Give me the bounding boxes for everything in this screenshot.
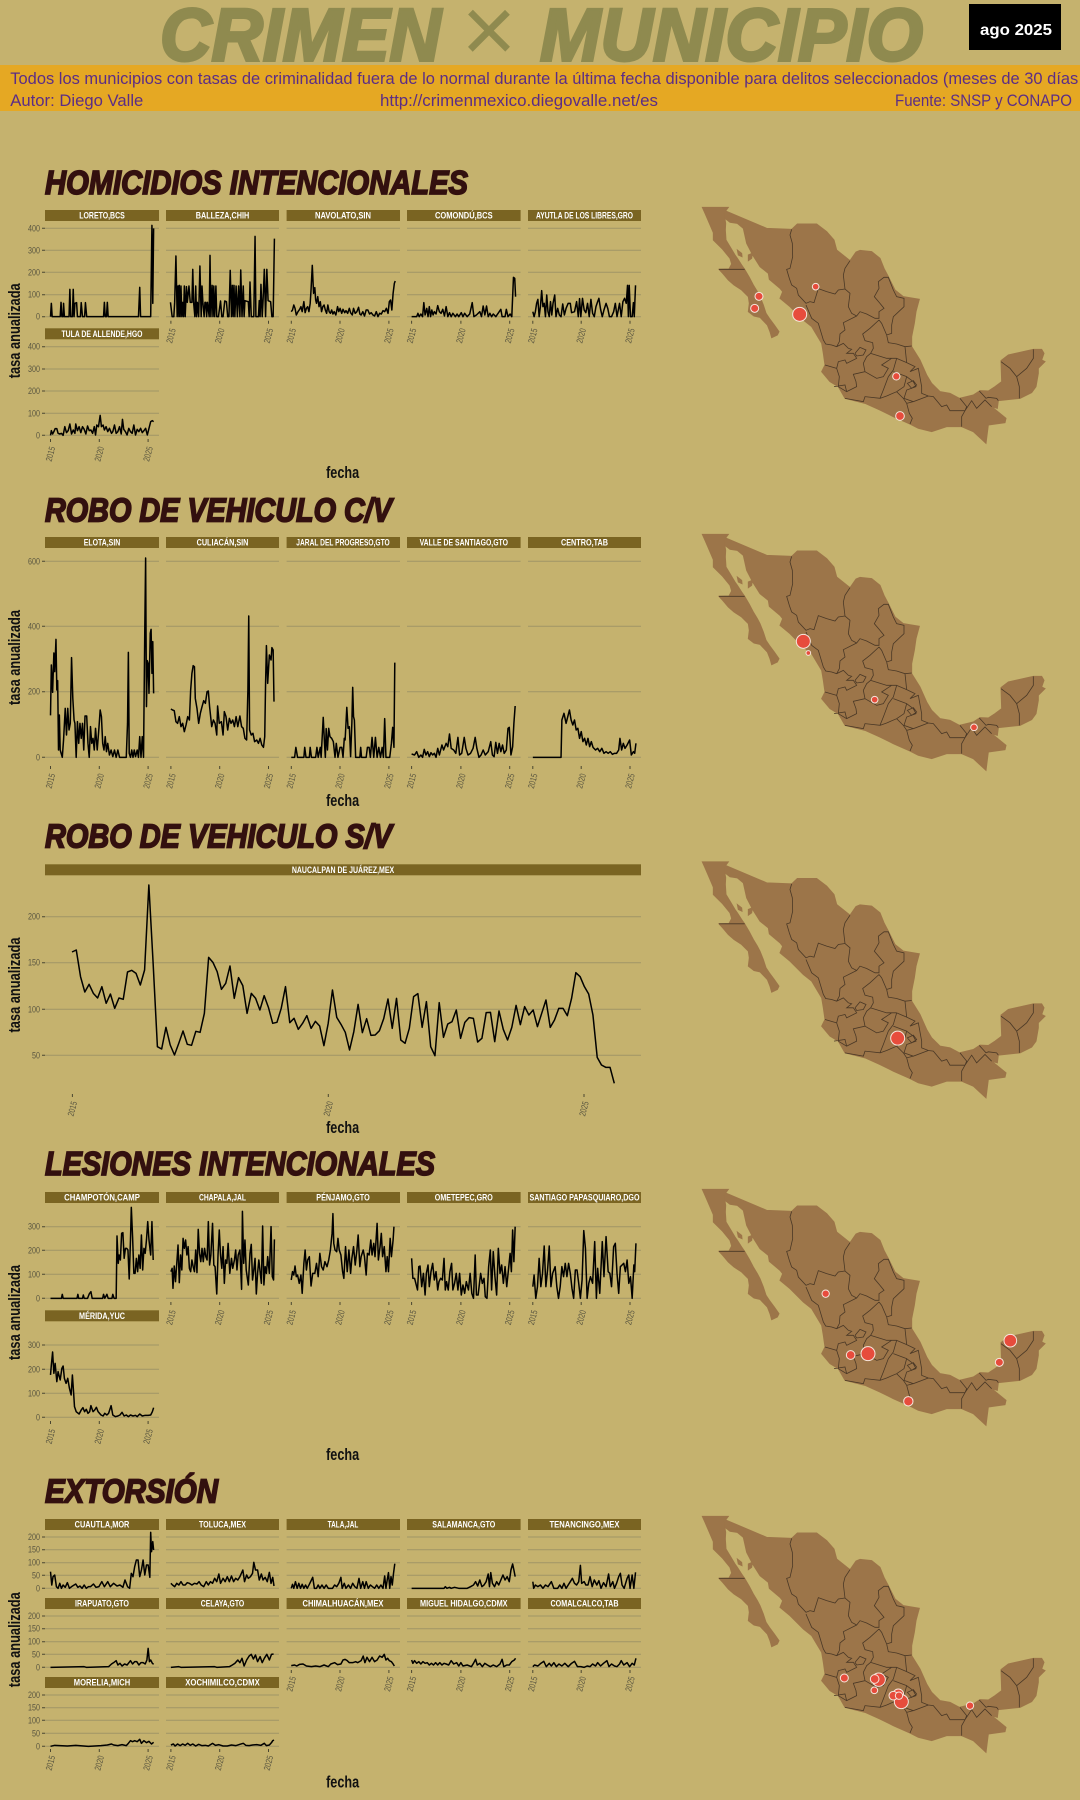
panel: Mérida: 2025 xyxy=(141,1428,155,1445)
panel: Ayutla: 2020 xyxy=(574,327,588,344)
panel: Valle de Santiago: 2015 xyxy=(405,772,418,790)
panel: Navolato: 2025 xyxy=(382,327,396,344)
panel: Chimalhuacán: 2015 xyxy=(285,1675,298,1693)
panel: Ometepec: 2020 xyxy=(454,1309,468,1326)
panel: Champotón: 300 xyxy=(28,1222,40,1232)
panel: Tula de Allende: 400 xyxy=(28,342,40,352)
panel: Tula de Allende: 200 xyxy=(28,386,40,396)
panel: Loreto: 200 xyxy=(28,267,40,277)
panel: Centro: 2020 xyxy=(574,772,588,790)
panel: Naucalpan de Juárez: 200 xyxy=(28,912,40,922)
panel: Elota: ELOTA,SIN xyxy=(84,538,120,548)
panel: Jaral del Progreso: 2025 xyxy=(382,772,396,790)
panel: Chimalhuacán: CHIMALHUACÁN,MEX xyxy=(302,1598,384,1610)
panel: Loreto: 400 xyxy=(28,223,40,233)
panel: Comondú xyxy=(405,210,521,344)
panel: Elota: 2015 xyxy=(44,772,57,790)
axis title y: tasa anualizada xyxy=(6,283,24,378)
panel: Salamanca: SALAMANCA,GTO xyxy=(432,1520,495,1530)
section: homicidios intencionales xyxy=(6,164,1045,482)
panel: Pénjamo: 2020 xyxy=(333,1309,347,1326)
panel: Tula de Allende: 2020 xyxy=(93,445,106,463)
panel: Elota: 0 xyxy=(36,752,40,762)
panel: Morelia xyxy=(28,1677,159,1772)
header band: http://crimenmexico.diegovalle.net/es xyxy=(380,91,658,110)
panel: Toluca xyxy=(166,1519,279,1588)
panel: Comondú: 2015 xyxy=(405,327,418,344)
panel: Mérida: 0 xyxy=(36,1412,40,1422)
date badge xyxy=(969,4,1061,50)
panel: Navolato: 2020 xyxy=(333,327,347,344)
panel: Tula de Allende: 2015 xyxy=(44,445,57,463)
panel: Irapuato: 200 xyxy=(28,1611,40,1621)
panel: Xochimilco: 2020 xyxy=(213,1754,226,1772)
panel: Mérida: 200 xyxy=(28,1364,40,1374)
axis title y: tasa anualizada xyxy=(6,1592,24,1687)
panel: Ayutla xyxy=(526,210,641,344)
heading: lesiones: LESIONES INTENCIONALES xyxy=(45,1145,435,1182)
panel: Tenancingo: TENANCINGO,MEX xyxy=(550,1520,620,1530)
panel: Comalcalco: COMALCALCO,TAB xyxy=(550,1598,619,1610)
panel: Chapala: CHAPALA,JAL xyxy=(199,1192,246,1204)
panel: Chapala: 2025 xyxy=(262,1309,275,1326)
panel: Elota: 2025 xyxy=(141,772,155,790)
map: homicidios xyxy=(702,207,1045,443)
panel: Miguel Hidalgo: 2020 xyxy=(454,1675,468,1693)
panel: Pénjamo: PÉNJAMO,GTO xyxy=(316,1192,370,1204)
panel: Irapuato: 50 xyxy=(32,1649,40,1659)
panel: Ometepec: 2015 xyxy=(405,1309,418,1326)
panel: Mérida: 2015 xyxy=(44,1428,57,1445)
panel: Ometepec: 2025 xyxy=(503,1309,516,1326)
panel: Ayutla: 2015 xyxy=(526,327,540,344)
panel: Balleza xyxy=(164,210,279,344)
heading: homicidios: HOMICIDIOS INTENCIONALES xyxy=(45,164,468,201)
panel: Naucalpan de Juárez: 2020 xyxy=(322,1100,335,1117)
panel: Loreto: 0 xyxy=(36,312,40,322)
panel: Salamanca xyxy=(407,1519,521,1588)
panel: Balleza: 2025 xyxy=(262,327,275,344)
panel: Balleza: 2020 xyxy=(213,327,226,344)
axis title y: tasa anualizada xyxy=(6,609,24,705)
panel: Pénjamo xyxy=(285,1192,400,1326)
panel: Valle de Santiago: VALLE DE SANTIAGO,GTO xyxy=(420,538,508,548)
heading: robo c/v: ROBO DE VEHICULO C/V xyxy=(45,492,395,528)
map: robo s/v xyxy=(702,862,1045,1098)
panel: Tula de Allende: 2025 xyxy=(141,445,155,463)
panel: Loreto: LORETO,BCS xyxy=(79,210,125,222)
panel: Mérida xyxy=(28,1310,159,1445)
panel: Centro xyxy=(526,537,641,790)
panel: Valle de Santiago: 2025 xyxy=(503,772,516,790)
panel: Celaya: CELAYA,GTO xyxy=(201,1598,244,1610)
panel: Cuautla: 100 xyxy=(28,1558,40,1568)
panel: Naucalpan de Juárez: 100 xyxy=(28,1004,40,1014)
panel: Comondú: 2025 xyxy=(503,327,516,344)
panel: Cuautla: 0 xyxy=(36,1583,40,1593)
panel: Chimalhuacán: 2020 xyxy=(333,1675,347,1693)
panel: Morelia: 150 xyxy=(28,1703,40,1713)
panel: Navolato xyxy=(285,210,400,344)
section: robo de vehiculo s/v xyxy=(6,818,1045,1137)
panel: Champotón: CHAMPOTÓN,CAMP xyxy=(64,1192,140,1204)
panel: Comondú: COMONDÚ,BCS xyxy=(435,210,493,222)
panel: Balleza: 2015 xyxy=(164,327,178,344)
panel: Santiago Papasquiaro: SANTIAGO PAPASQUIARO,DGO xyxy=(530,1192,640,1204)
panel: Irapuato: IRAPUATO,GTO xyxy=(75,1598,129,1610)
panel: Comalcalco xyxy=(526,1598,641,1693)
axis title x: fecha xyxy=(326,1446,360,1464)
panel: Pénjamo: 2025 xyxy=(382,1309,396,1326)
panel: Irapuato: 100 xyxy=(28,1637,40,1647)
panel: Xochimilco xyxy=(164,1677,279,1772)
panel: Champotón: 200 xyxy=(28,1245,40,1255)
panel: Centro: CENTRO,TAB xyxy=(561,538,608,548)
map: lesiones xyxy=(702,1189,1045,1425)
panel: Tula de Allende: 100 xyxy=(28,408,40,418)
axis title x: fecha xyxy=(326,1774,360,1792)
panel: Balleza: BALLEZA,CHIH xyxy=(196,210,249,222)
panel: Culiacán: 2015 xyxy=(164,772,178,790)
panel: Valle de Santiago xyxy=(405,537,521,790)
panel: Centro: 2025 xyxy=(623,772,637,790)
panel: Tala xyxy=(287,1519,400,1588)
panel: Comalcalco: 2025 xyxy=(623,1675,637,1693)
panel: Morelia: 2020 xyxy=(93,1754,106,1772)
panel: Morelia: 0 xyxy=(36,1741,40,1751)
panel: Comondú: 2020 xyxy=(454,327,468,344)
panel: Jaral del Progreso xyxy=(285,537,400,790)
panel: Elota xyxy=(28,537,159,790)
panel: Naucalpan de Juárez xyxy=(28,864,641,1117)
panel: Morelia: MORELIA,MICH xyxy=(74,1678,130,1688)
panel: Mérida: MÉRIDA,YUC xyxy=(79,1311,125,1322)
panel: Naucalpan de Juárez: 2015 xyxy=(66,1100,79,1117)
panel: Navolato: NAVOLATO,SIN xyxy=(315,210,371,222)
axis title y: tasa anualizada xyxy=(6,1264,24,1360)
panel: Santiago Papasquiaro: 2020 xyxy=(574,1309,588,1326)
axis title x: fecha xyxy=(326,464,360,482)
axis title y: tasa anualizada xyxy=(6,937,24,1032)
panel: Morelia: 2015 xyxy=(44,1754,57,1772)
title xyxy=(160,0,923,82)
panel: Miguel Hidalgo: 2025 xyxy=(503,1675,516,1693)
panel: Elota: 200 xyxy=(28,687,40,697)
panel: Comalcalco: 2020 xyxy=(574,1675,588,1693)
panel: Comalcalco: 2015 xyxy=(526,1675,540,1693)
panel: Miguel Hidalgo: 2015 xyxy=(405,1675,418,1693)
date badge: ago 2025 xyxy=(980,22,1052,39)
panel: Culiacán xyxy=(164,537,279,790)
section: extorsión xyxy=(6,1472,1045,1792)
map: extorsión xyxy=(702,1516,1045,1752)
panel: Chimalhuacán xyxy=(285,1598,400,1693)
panel: Ometepec xyxy=(405,1192,521,1326)
map: robo c/v xyxy=(702,534,1045,770)
panel: Tenancingo xyxy=(528,1519,641,1588)
panel: Elota: 2020 xyxy=(93,772,106,790)
panel: Cuautla: 50 xyxy=(32,1570,40,1580)
panel: Tala: TALA,JAL xyxy=(328,1520,358,1530)
panel: Santiago Papasquiaro: 2025 xyxy=(623,1309,637,1326)
panel: Valle de Santiago: 2020 xyxy=(454,772,468,790)
panel: Cuautla: 150 xyxy=(28,1545,40,1555)
panel: Tula de Allende: TULA DE ALLENDE,HGO xyxy=(62,329,142,340)
panel: Xochimilco: 2015 xyxy=(164,1754,178,1772)
panel: Mérida: 100 xyxy=(28,1388,40,1398)
panel: Ometepec: OMETEPEC,GRO xyxy=(435,1192,493,1204)
panel: Celaya xyxy=(166,1598,279,1667)
panel: Champotón: 100 xyxy=(28,1269,40,1279)
panel: Xochimilco: XOCHIMILCO,CDMX xyxy=(185,1678,260,1688)
panel: Culiacán: 2025 xyxy=(262,772,275,790)
panel: Ayutla: AYUTLA DE LOS LIBRES,GRO xyxy=(536,210,633,222)
section: lesiones intencionales xyxy=(6,1145,1045,1464)
panel: Morelia: 100 xyxy=(28,1715,40,1725)
panel: Toluca: TOLUCA,MEX xyxy=(199,1520,247,1530)
panel: Chapala: 2015 xyxy=(164,1309,178,1326)
panel: Miguel Hidalgo xyxy=(405,1598,521,1693)
panel: Elota: 400 xyxy=(28,621,40,631)
panel: Irapuato: 0 xyxy=(36,1662,40,1672)
panel: Loreto: 300 xyxy=(28,245,40,255)
panel: Naucalpan de Juárez: 2025 xyxy=(577,1100,591,1117)
panel: Mérida: 2020 xyxy=(93,1428,106,1445)
panel: Morelia: 50 xyxy=(32,1728,40,1738)
panel: Jaral del Progreso: 2020 xyxy=(333,772,347,790)
panel: Chapala: 2020 xyxy=(213,1309,226,1326)
panel: Culiacán: 2020 xyxy=(213,772,226,790)
panel: Miguel Hidalgo: MIGUEL HIDALGO,CDMX xyxy=(420,1598,508,1610)
panel: Navolato: 2015 xyxy=(285,327,298,344)
heading: extorsión: EXTORSIÓN xyxy=(45,1472,219,1510)
panel: Naucalpan de Juárez: 50 xyxy=(32,1050,40,1060)
panel: Culiacán: CULIACÁN,SIN xyxy=(197,538,248,548)
panel: Ayutla: 2025 xyxy=(623,327,637,344)
panel: Xochimilco: 2025 xyxy=(262,1754,275,1772)
panel: Champotón: 0 xyxy=(36,1293,40,1303)
panel: Tula de Allende: 0 xyxy=(36,430,40,440)
panel: Santiago Papasquiaro xyxy=(526,1192,641,1326)
axis title x: fecha xyxy=(326,792,360,810)
panel: Centro: 2015 xyxy=(526,772,540,790)
panel: Cuautla: CUAUTLA,MOR xyxy=(75,1520,129,1530)
panel: Santiago Papasquiaro: 2015 xyxy=(526,1309,540,1326)
header band xyxy=(0,65,1080,111)
panel: Irapuato: 150 xyxy=(28,1624,40,1634)
panel: Pénjamo: 2015 xyxy=(285,1309,298,1326)
panel: Chapala xyxy=(164,1192,279,1326)
heading: robo s/v: ROBO DE VEHICULO S/V xyxy=(45,818,395,855)
panel: Tula de Allende xyxy=(28,328,159,463)
panel: Jaral del Progreso: JARAL DEL PROGRESO,GTO xyxy=(296,538,390,548)
panel: Loreto: 100 xyxy=(28,290,40,300)
header band: Autor: Diego Valle xyxy=(10,91,143,110)
panel: Morelia: 200 xyxy=(28,1690,40,1700)
panel: Naucalpan de Juárez: 150 xyxy=(28,958,40,968)
panel: Mérida: 300 xyxy=(28,1340,40,1350)
panel: Cuautla: 200 xyxy=(28,1532,40,1542)
panel: Cuautla xyxy=(28,1519,159,1593)
panel: Champotón xyxy=(28,1192,159,1303)
panel: Morelia: 2025 xyxy=(141,1754,155,1772)
section: robo de vehiculo c/v xyxy=(6,492,1045,810)
panel: Loreto xyxy=(28,210,159,322)
panel: Tula de Allende: 300 xyxy=(28,364,40,374)
panel: Chimalhuacán: 2025 xyxy=(382,1675,396,1693)
panel: Elota: 600 xyxy=(28,556,40,566)
panel: Jaral del Progreso: 2015 xyxy=(285,772,298,790)
panel: Irapuato xyxy=(28,1598,159,1672)
panel: Naucalpan de Juárez: NAUCALPAN DE JUÁREZ,MEX xyxy=(292,865,395,876)
axis title x: fecha xyxy=(326,1119,360,1137)
